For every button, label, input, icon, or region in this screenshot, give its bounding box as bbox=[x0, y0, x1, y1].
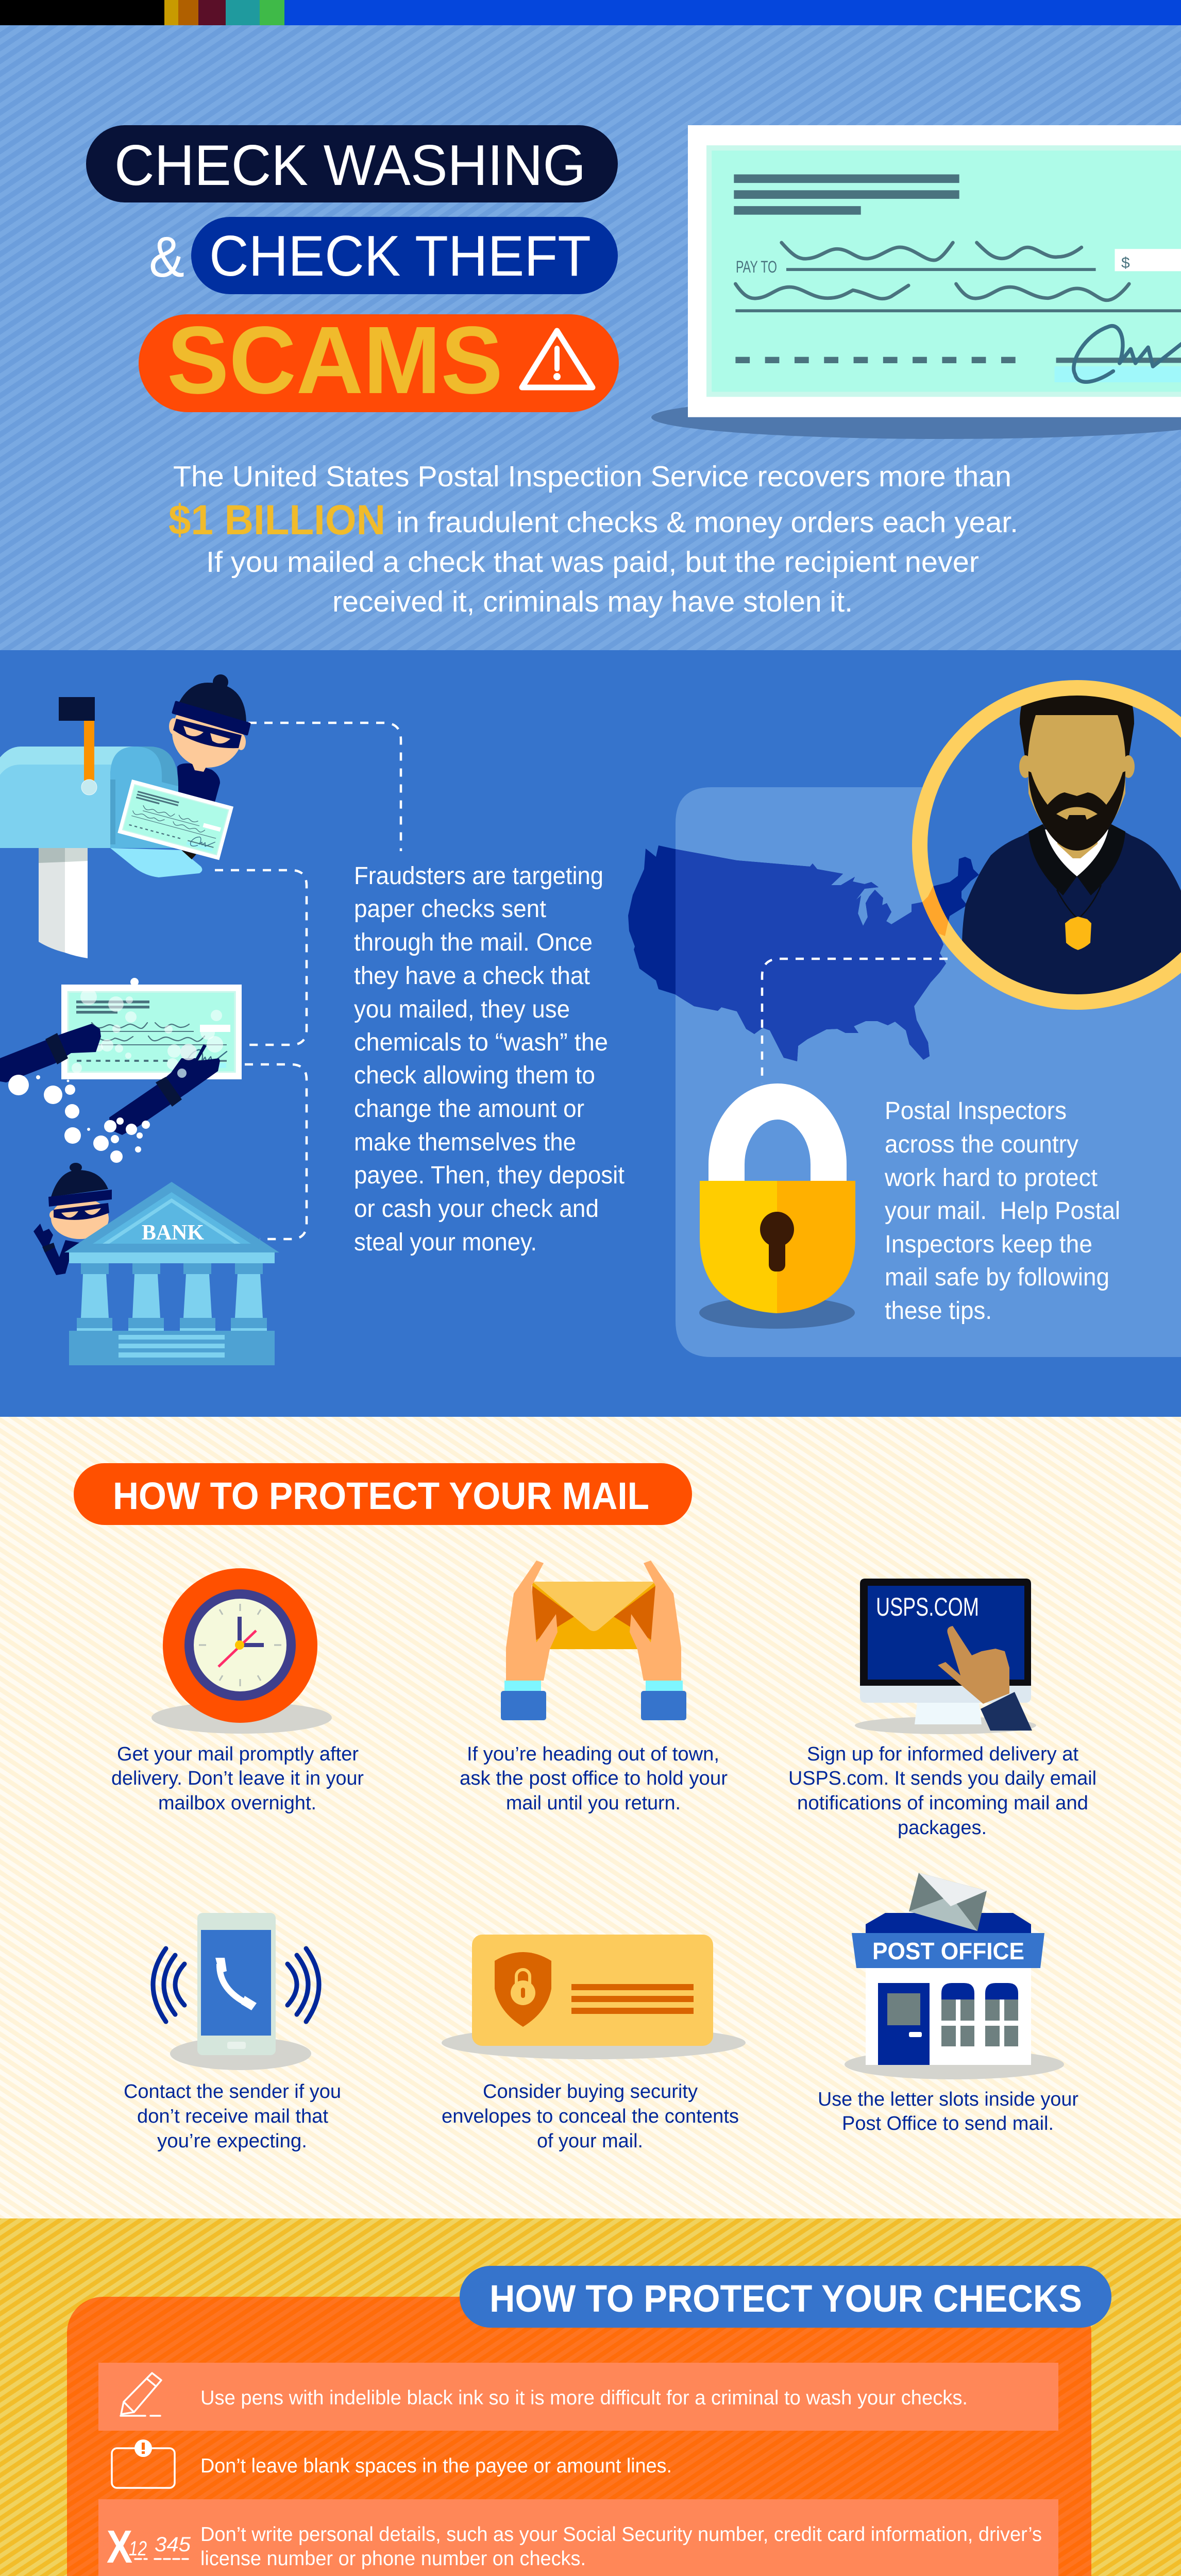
check in hand bbox=[117, 779, 233, 860]
intro paragraph: If you mailed a check that was paid, but the recipient never bbox=[206, 546, 979, 579]
map: united states bbox=[628, 845, 979, 1061]
title pill: check theft: & bbox=[149, 225, 184, 289]
text: hold mail tip bbox=[460, 1743, 728, 1814]
inspector ring bbox=[912, 680, 1181, 1010]
text: security envelopes tip: of your mail. bbox=[537, 2130, 643, 2152]
text: hold mail tip: mail until you return. bbox=[506, 1792, 681, 1814]
bubbles on check bbox=[72, 989, 223, 1073]
row: blank spaces bbox=[112, 2439, 672, 2488]
icon: warning triangle bbox=[522, 331, 593, 387]
illustration: thief at bank bbox=[33, 1163, 279, 1365]
inspector lanyard bbox=[1057, 885, 1101, 918]
gloved arm right bbox=[109, 1044, 220, 1135]
text: security envelopes tip bbox=[442, 2081, 739, 2152]
intro paragraph: The United States Postal Inspection Service recovers more than bbox=[173, 460, 1011, 493]
title pill: check theft: CHECK THEFT bbox=[209, 224, 591, 288]
inspector collar bbox=[1028, 824, 1125, 895]
inspector circle background bbox=[920, 688, 1181, 1002]
bubbles bbox=[8, 978, 150, 1163]
checks card background bbox=[67, 2297, 1091, 2576]
icon: pen bbox=[121, 2373, 161, 2416]
tip: post office bbox=[818, 1873, 1078, 2134]
tip: informed delivery bbox=[788, 1579, 1096, 1839]
title pill: scams: SCAMS bbox=[167, 307, 503, 414]
fraud explanation text: change the amount or bbox=[354, 1095, 584, 1123]
text: security envelopes tip: envelopes to conceal the contents bbox=[442, 2106, 739, 2127]
fraud explanation text: make themselves the bbox=[354, 1129, 576, 1156]
title pill: check washing: CHECK WASHING bbox=[114, 133, 586, 197]
heading: protect your mail bbox=[74, 1463, 692, 1525]
row: indelible ink bbox=[98, 2363, 1058, 2431]
intro paragraph bbox=[168, 460, 1018, 618]
icon: written numbers: 345 bbox=[155, 2533, 191, 2556]
text: contact sender tip: Contact the sender if you bbox=[124, 2081, 341, 2103]
heading: protect your checks: HOW TO PROTECT YOUR CHECKS bbox=[490, 2277, 1082, 2320]
icon: security envelope bbox=[442, 1935, 746, 2059]
bank building bbox=[64, 1182, 279, 1365]
text: hold mail tip: ask the post office to hold your bbox=[460, 1768, 728, 1789]
inspector ears bbox=[1019, 755, 1032, 778]
intro paragraph: received it, criminals may have stolen it. bbox=[332, 585, 853, 618]
text: informed delivery tip: packages. bbox=[898, 1817, 987, 1839]
heading: protect your checks bbox=[460, 2266, 1111, 2328]
tip: contact sender bbox=[124, 1913, 341, 2152]
icon: computer monitor: USPS.COM bbox=[876, 1592, 979, 1621]
text: post office tip bbox=[818, 2089, 1078, 2134]
text: clock tip: Get your mail promptly after bbox=[117, 1743, 359, 1765]
icon: envelope and hands bbox=[501, 1561, 686, 1720]
inspector shirt bbox=[1045, 829, 1108, 876]
icon: blank field bbox=[112, 2439, 175, 2488]
illustration: mailbox bbox=[0, 674, 249, 958]
thief head bbox=[49, 1198, 109, 1239]
text: informed delivery tip: notifications of incoming mail and bbox=[797, 1792, 1088, 1814]
text: contact sender tip bbox=[124, 2081, 341, 2152]
inspectors text: Postal Inspectors bbox=[885, 1097, 1067, 1125]
fraud explanation text: you mailed, they use bbox=[354, 996, 570, 1023]
inspectors text: across the country bbox=[885, 1131, 1078, 1158]
text: contact sender tip: don’t receive mail that bbox=[137, 2106, 328, 2127]
illustration: inspector bbox=[962, 696, 1181, 1010]
tip: hold mail bbox=[460, 1561, 728, 1814]
fraud explanation text: or cash your check and bbox=[354, 1195, 599, 1223]
inspectors text: mail safe by following bbox=[885, 1264, 1109, 1291]
illustration: large check: PAY TO bbox=[736, 258, 777, 276]
text: contact sender tip: you’re expecting. bbox=[157, 2130, 307, 2152]
illustration: padlock bbox=[699, 1101, 855, 1329]
inspectors text: these tips. bbox=[885, 1297, 992, 1325]
inspector hair bbox=[1020, 696, 1134, 760]
row: personal details: Don’t write personal details, such as your Social Security number, credit card information, driver’s bbox=[200, 2523, 1042, 2546]
thief body bbox=[177, 764, 220, 802]
text: hold mail tip: If you’re heading out of town, bbox=[467, 1743, 719, 1765]
top colour bar bbox=[0, 0, 1181, 25]
icon: ringing phone bbox=[153, 1913, 319, 2070]
text: security envelopes tip: Consider buying security bbox=[483, 2081, 698, 2103]
inspector face bbox=[1028, 715, 1125, 845]
row: indelible ink: Use pens with indelible black ink so it is more difficult for a criminal to wash your checks. bbox=[200, 2387, 968, 2409]
row: personal details: license number or phone number on checks. bbox=[200, 2548, 586, 2570]
panel: hero bbox=[0, 25, 1181, 650]
panel: how the scam works bbox=[0, 650, 1181, 1417]
fraud explanation text: payee. Then, they deposit bbox=[354, 1162, 625, 1189]
row: blank spaces: Don’t leave blank spaces in the payee or amount lines. bbox=[200, 2455, 672, 2477]
inspector beard bbox=[1028, 771, 1125, 851]
mailbox door bbox=[110, 848, 202, 877]
inspectors text bbox=[884, 1097, 1120, 1325]
fraud explanation text: Fraudsters are targeting bbox=[354, 862, 603, 890]
icon: inspector badge bbox=[1065, 917, 1091, 950]
text: clock tip bbox=[111, 1743, 364, 1814]
panel: inspectors background bbox=[676, 787, 1181, 1357]
fraud explanation text bbox=[354, 862, 625, 1256]
inspectors text: Inspectors keep the bbox=[885, 1231, 1092, 1258]
inspectors text: work hard to protect bbox=[884, 1164, 1098, 1192]
icon: written numbers bbox=[107, 2521, 191, 2573]
icon: written numbers: 12 bbox=[129, 2537, 147, 2560]
icon: written numbers: X bbox=[107, 2521, 132, 2573]
icon: post office bbox=[845, 1873, 1064, 2079]
text: informed delivery tip bbox=[788, 1743, 1096, 1839]
thief arm bbox=[44, 1240, 79, 1275]
inspectors text: your mail. Help Postal bbox=[885, 1197, 1120, 1225]
thief head bbox=[169, 674, 249, 772]
tip: clock bbox=[111, 1568, 364, 1814]
dashed connector: inspector to lock bbox=[762, 959, 948, 1083]
bank building: BANK bbox=[142, 1221, 204, 1245]
fraud explanation text: through the mail. Once bbox=[354, 929, 593, 956]
illustration: washing check bbox=[0, 978, 242, 1163]
dashed connectors: fraud steps bbox=[215, 723, 401, 1239]
heading: protect your mail: HOW TO PROTECT YOUR MAIL bbox=[113, 1475, 649, 1517]
inspector mouth bbox=[1056, 807, 1098, 820]
panel: how to protect your checks bbox=[0, 2218, 1181, 2576]
row: personal details bbox=[98, 2499, 1058, 2576]
gloved arm left bbox=[0, 1024, 101, 1082]
text: informed delivery tip: USPS.com. It sends you daily email bbox=[788, 1768, 1096, 1789]
mailbox post bbox=[39, 848, 65, 953]
panel: how to protect your mail bbox=[0, 1417, 1181, 2218]
intro paragraph: $1 BILLION bbox=[168, 497, 385, 544]
text: informed delivery tip: Sign up for informed delivery at bbox=[807, 1743, 1078, 1765]
text: post office tip: Use the letter slots inside your bbox=[818, 2089, 1078, 2110]
fraud explanation text: steal your money. bbox=[354, 1229, 537, 1256]
tip: security envelopes bbox=[442, 1935, 746, 2152]
mailbox flag bbox=[84, 721, 94, 781]
icon: post office: POST OFFICE bbox=[872, 1938, 1024, 1964]
inspector jacket bbox=[962, 824, 1181, 1010]
icon: clock bbox=[151, 1568, 332, 1734]
fraud explanation text: chemicals to “wash” the bbox=[354, 1029, 608, 1056]
intro paragraph: in fraudulent checks & money orders each year. bbox=[396, 506, 1018, 539]
text: post office tip: Post Office to send mail. bbox=[842, 2113, 1054, 2134]
inspector neck bbox=[1057, 824, 1098, 858]
fraud explanation text: they have a check that bbox=[354, 962, 590, 990]
icon: computer monitor bbox=[855, 1579, 1036, 1734]
text: clock tip: delivery. Don’t leave it in your bbox=[111, 1768, 364, 1789]
fraud explanation text: check allowing them to bbox=[354, 1062, 595, 1089]
text: clock tip: mailbox overnight. bbox=[158, 1792, 316, 1814]
fraud explanation text: paper checks sent bbox=[354, 895, 546, 923]
mailbox body bbox=[0, 747, 139, 848]
illustration: large check: $ bbox=[1121, 255, 1130, 272]
illustration: large check bbox=[651, 125, 1181, 439]
